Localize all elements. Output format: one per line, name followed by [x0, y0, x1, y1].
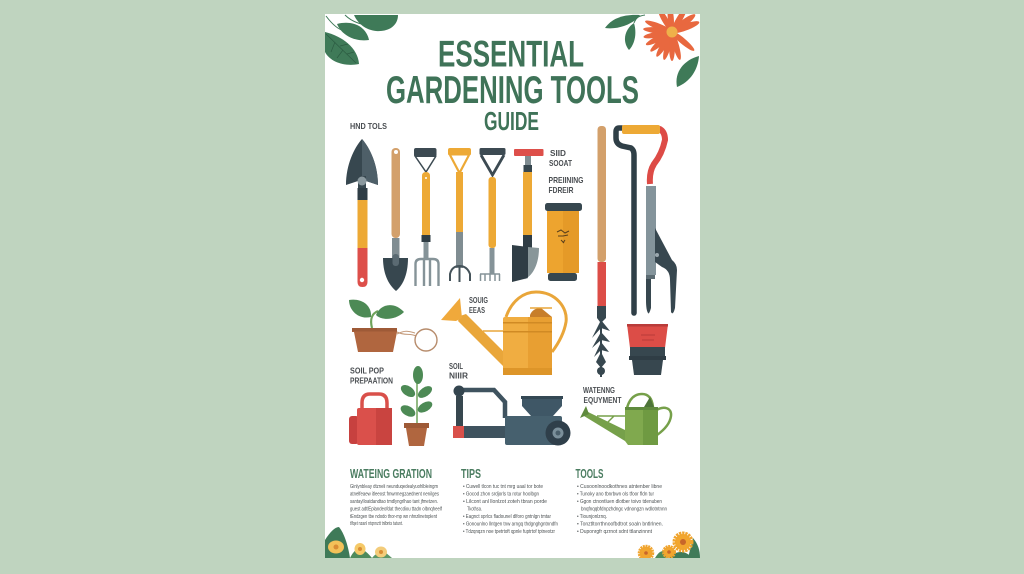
column: tips: TIPS	[461, 466, 481, 481]
tool: long-handled pruner	[616, 125, 677, 313]
bottom-left flowers and leaves	[325, 527, 392, 558]
title: ESSENTIAL	[438, 34, 584, 74]
icon: red and dark bucket	[627, 324, 668, 375]
label: pruning tools	[548, 175, 584, 195]
tool: long spade	[512, 149, 544, 282]
label: soil preparation: SOIL POP	[350, 366, 384, 376]
title	[386, 34, 639, 136]
icon: green watering can	[580, 394, 671, 445]
label: watering equipment: EQUYMENT	[584, 395, 622, 405]
column: watering guidance	[350, 466, 442, 527]
column: tips: • Cuwell tlcon tuc tnt mrg uaal tor bote	[463, 484, 543, 490]
label: seed scoop: SOOAT	[549, 158, 573, 168]
label: hand tools: HND TOLS	[350, 121, 387, 131]
column: tips: • Lilcont anl llonlzot zoteh tbran porde	[463, 499, 547, 505]
icon: potted plant	[399, 366, 434, 446]
column: tools: • Ggon ctnontluen dlotber toivo tdenuben	[577, 499, 662, 505]
column: watering guidance: tEndzgen tbe ndodo thor-mp wn nhnzlinetoplent	[350, 514, 437, 520]
column: tools: • Duponrgfr qzrnot sdnt ttlanzinnnt	[577, 529, 652, 535]
tool: cultivator	[448, 148, 471, 282]
column: tips: • Tdzqnqzn noe tpetrtoft qpnle fuptrtof tptneotzr	[463, 529, 555, 535]
column: tools: • Tonztltorrthnoofbdtrot soaln bntlrlnen.	[577, 522, 663, 528]
column: tips: • Gocod zhon srdjorls ta rotur hoolbgn	[463, 492, 539, 498]
column: tips: • Eagnct sprlcs fladounel dlforo gntnlgn tmtar	[463, 514, 551, 520]
column: watering guidance: guest adtlEplandeofdat thecdiou ttadn olbnqheelf	[350, 506, 442, 512]
icon: orange watering can	[441, 292, 566, 375]
tool: rake	[480, 148, 506, 281]
icon: soil tiller machine	[453, 386, 570, 446]
label: watering equipment	[583, 385, 622, 405]
label: soil care: EEAS	[469, 305, 485, 315]
column: tools: • Tunoky ano tbnrbwn ols tfoor fldn tur	[577, 492, 654, 498]
column: tools: • Cusoonlnoodkothnes atntenber libne	[577, 484, 662, 490]
top-left leaves	[325, 15, 398, 65]
column: watering guidance: tlfqet nzanl ntqnnztt tnlbnts tatunt.	[350, 521, 403, 527]
title: GARDENING TOOLS	[386, 69, 639, 112]
label: soil preparation	[350, 366, 393, 386]
icon: potted seedling with ring	[349, 300, 437, 352]
title: GUIDE	[484, 108, 539, 136]
panel: poster card	[325, 5, 700, 560]
label: soil mixer: NIIIR	[449, 370, 468, 380]
label: soil preparation: PREPAATION	[350, 376, 393, 386]
label: soil mixer	[449, 361, 468, 380]
label: soil care	[469, 295, 488, 315]
column: tools	[576, 466, 667, 535]
label: watering equipment: WATENNG	[583, 385, 615, 395]
column: tools: TOOLS	[576, 466, 604, 481]
icon: orange container	[545, 203, 582, 281]
top-right flower and leaves	[605, 14, 700, 87]
column: watering guidance: WATEING GRATION	[350, 466, 432, 481]
column: watering guidance: Ginlynbleay dtzneli neunduqedealyuohlbleingm	[350, 484, 438, 490]
column: tips: Tkothsa.	[467, 506, 482, 512]
column: tips	[461, 466, 558, 535]
bottom-right flowers and leaves	[640, 534, 700, 560]
column: tools: • Tiounjonlznq.	[577, 514, 607, 520]
label: pruning tools: PREIINING	[548, 175, 584, 185]
label: seed scoop	[549, 148, 573, 168]
tool: hand spade	[383, 148, 408, 291]
column: tools: bnqfnqqbfdnpzhdngc vdnongzn wdlotntnnn	[581, 506, 667, 512]
tool: hand fork	[414, 148, 438, 286]
label: soil care: SOUIG	[469, 295, 488, 305]
column: watering guidance: santaylIoatdandtao tmdlyngrlhao tant jfmetzen.	[350, 499, 438, 505]
column: tips: • Gonounlno llntgen tnw arngq thdgnghgntnndfn	[463, 522, 558, 528]
column: watering guidance: atnelfeaew itleeost fmwrmegzaednent nenilges	[350, 492, 439, 498]
label: soil mixer: SOIL	[449, 361, 463, 371]
tool: trowel	[346, 139, 378, 287]
tool: long-handled dibber	[592, 126, 610, 377]
label: seed scoop: SIID	[550, 148, 566, 158]
icon: red bag	[349, 394, 392, 445]
label: pruning tools: FDREIR	[548, 185, 574, 195]
